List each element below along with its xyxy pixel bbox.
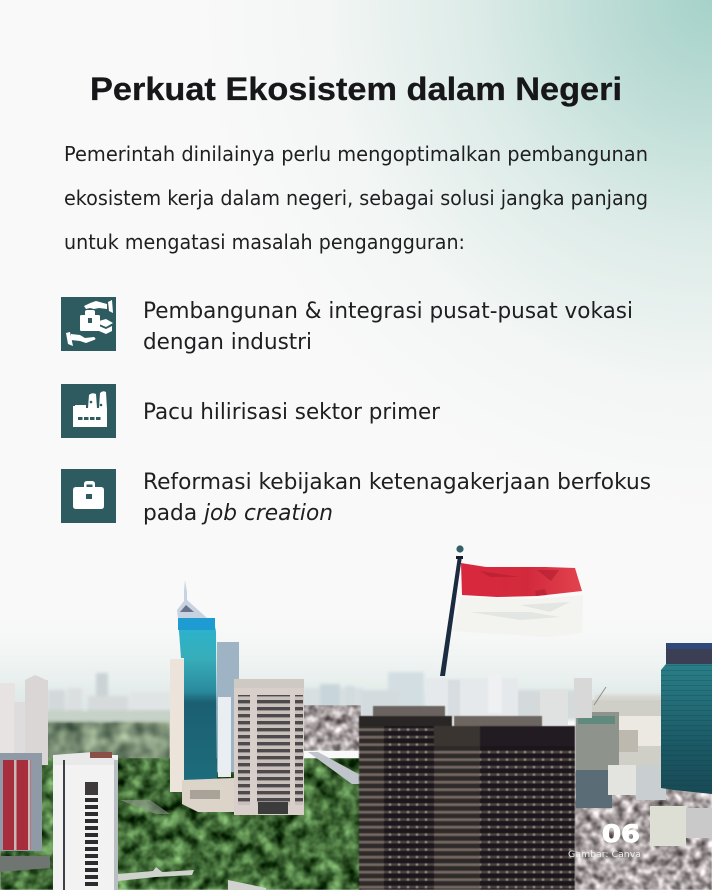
image credit: Gambar: Canva xyxy=(568,850,641,860)
white foreground building xyxy=(53,752,118,890)
intro text block: ekosistem kerja dalam negeri, sebagai solusi jangka panjang xyxy=(64,186,648,210)
item text: Pembangunan & integrasi pusat-pusat vokasi xyxy=(143,299,633,324)
item text: Reformasi kebijakan ketenagakerjaan berfokus xyxy=(143,470,651,495)
item text: pada job creation xyxy=(143,501,333,526)
left residential towers xyxy=(0,675,48,851)
flag cloth xyxy=(452,563,583,637)
item text: dengan industri xyxy=(143,330,312,355)
page number: 06 xyxy=(602,820,640,848)
teal glass building xyxy=(661,643,712,794)
intro text block: Pemerintah dinilainya perlu mengoptimalkan pembangunan xyxy=(64,142,648,166)
flag xyxy=(440,545,583,676)
distant skyline xyxy=(48,672,665,725)
list item: vocational integration xyxy=(61,297,633,355)
item text xyxy=(143,470,651,526)
flagpole xyxy=(440,545,464,676)
item text xyxy=(143,299,633,355)
midground city and greenery xyxy=(0,716,170,761)
title: Perkuat Ekosistem dalam Negeri xyxy=(90,71,622,107)
list item: downstreaming xyxy=(61,384,441,438)
item text: Pacu hilirisasi sektor primer xyxy=(143,400,441,425)
list item: labor policy xyxy=(61,469,651,526)
icon: briefcase xyxy=(61,469,116,523)
icon: factory xyxy=(61,384,116,438)
office tower with bands xyxy=(234,679,304,815)
intro text block xyxy=(64,142,648,254)
city skyline photo xyxy=(0,580,712,890)
icon: hands with briefcase xyxy=(61,297,116,351)
wisma tower xyxy=(170,580,239,812)
dark twin towers xyxy=(359,706,575,890)
far residential behind flag xyxy=(426,673,518,718)
intro text block: untuk mengatasi masalah pengangguran: xyxy=(64,230,465,254)
